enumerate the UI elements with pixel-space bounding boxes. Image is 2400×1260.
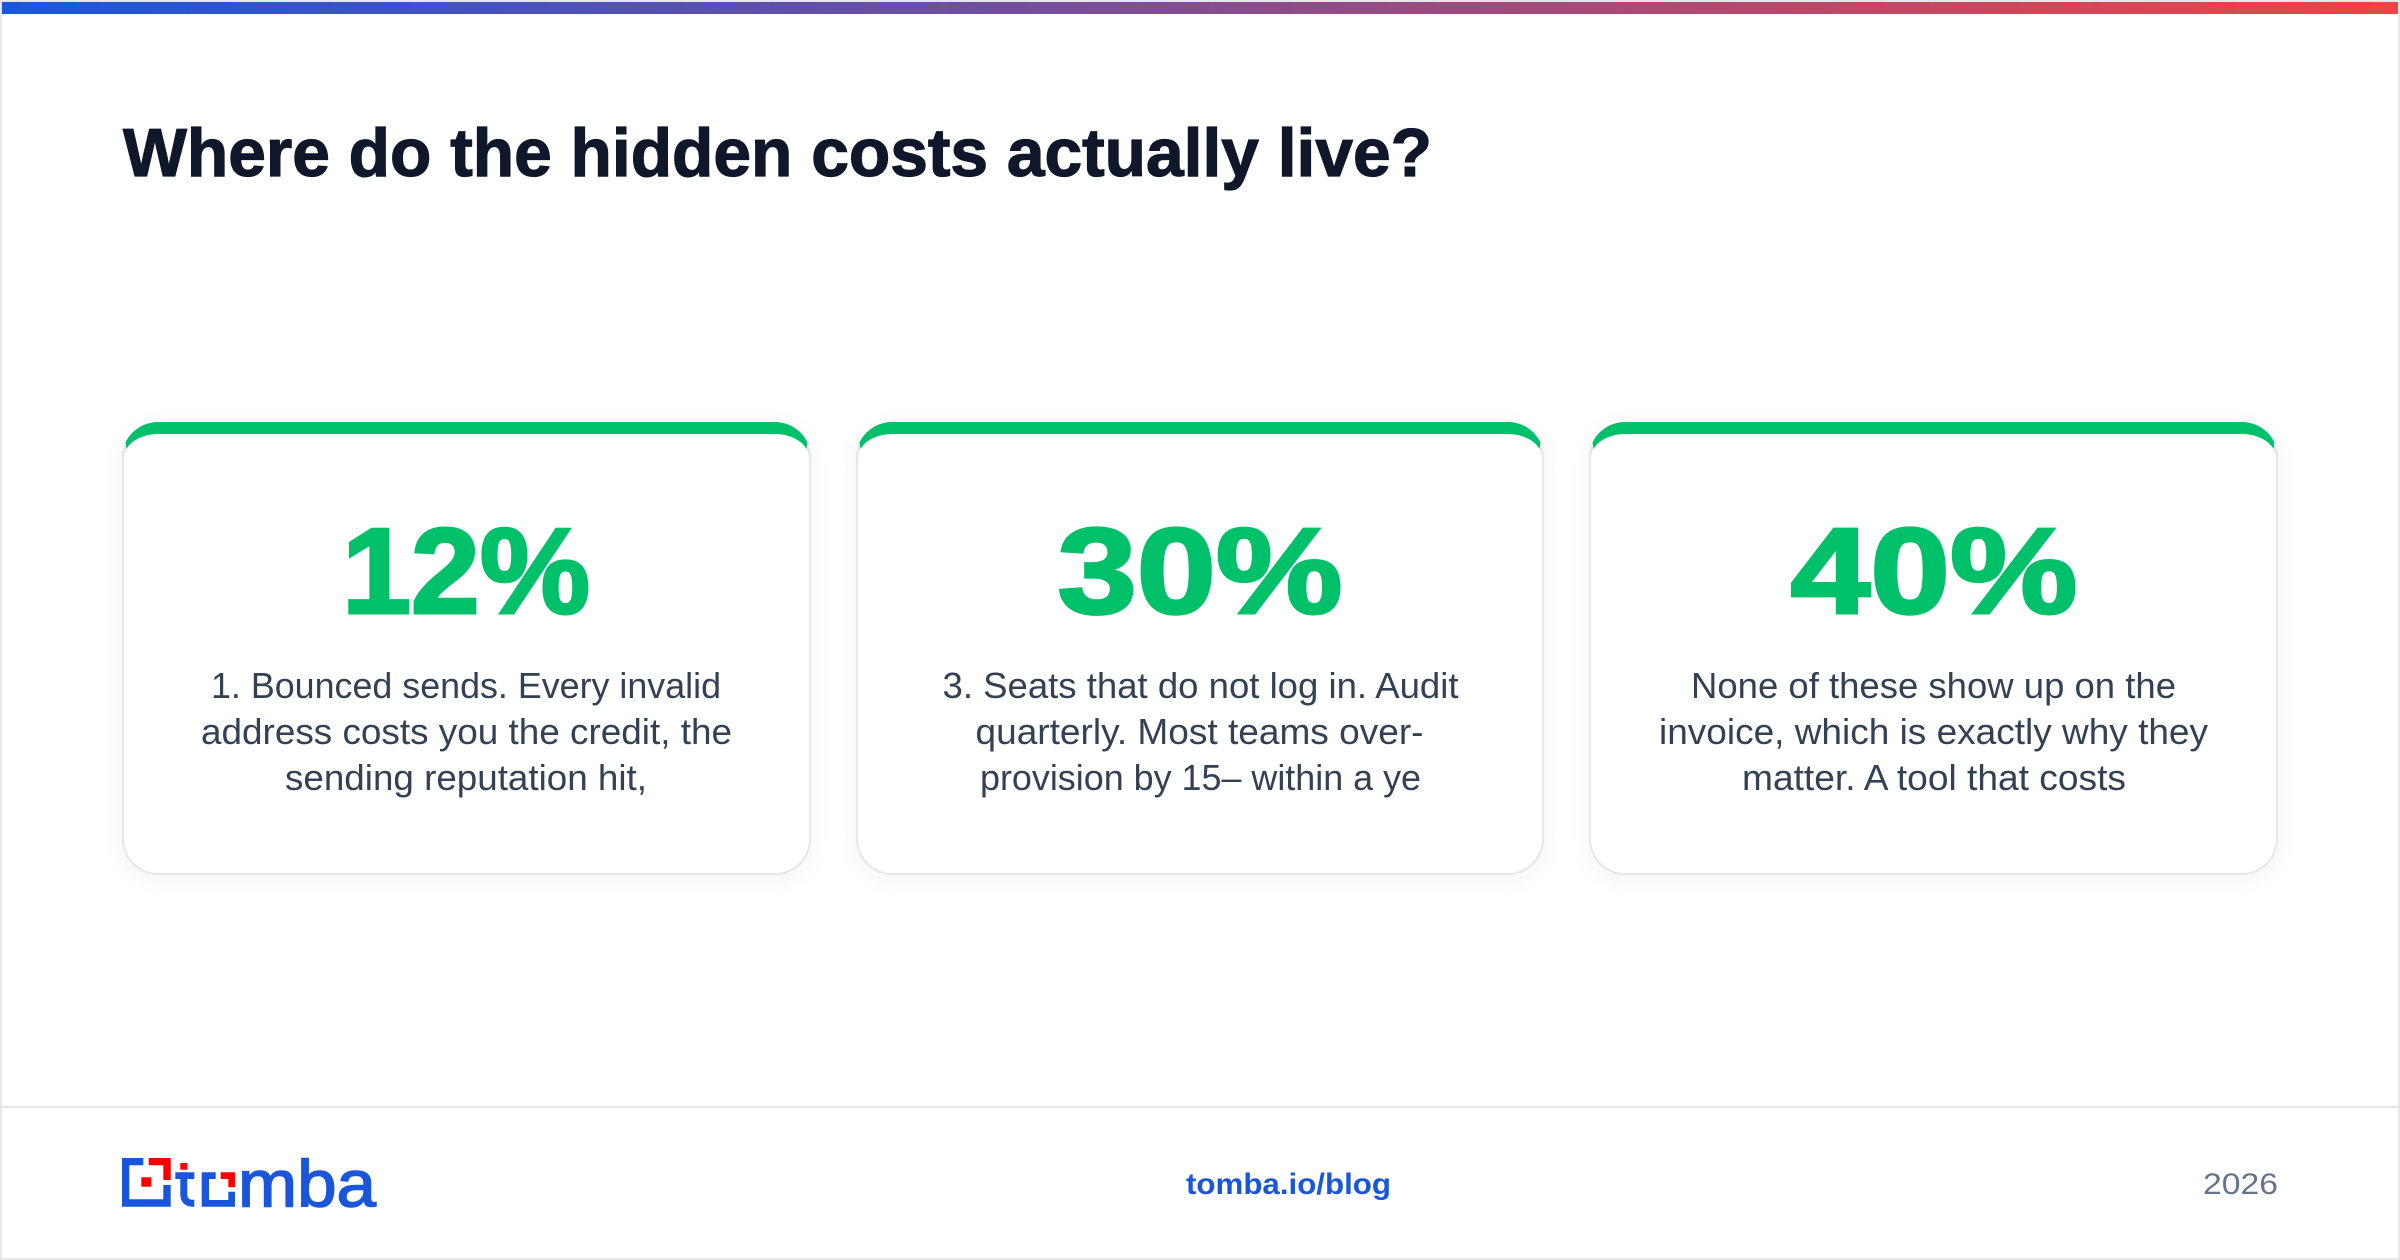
stat: 40%: 40% (1790, 503, 2078, 639)
description (201, 665, 732, 798)
card background (122, 422, 811, 875)
card content (201, 503, 732, 798)
title: Where do the hidden costs actually live? (123, 115, 1432, 191)
panel: bounced sends card (122, 422, 811, 875)
wordmark letters: mba (238, 1147, 376, 1221)
panel: unused seats card (856, 422, 1544, 875)
description: invoice, which is exactly why they (1659, 711, 2208, 752)
description: sending reputation hit, (285, 757, 647, 798)
top gradient bar (2, 2, 2398, 14)
description (942, 665, 1458, 798)
card content (942, 503, 1458, 798)
panel: invoice card (1589, 422, 2278, 875)
card background (1589, 422, 2278, 875)
description: None of these show up on the (1691, 665, 2176, 706)
icon: logo mark (122, 1158, 171, 1207)
description: address costs you the credit, the (201, 711, 732, 752)
icon: stylised t (175, 1163, 194, 1203)
description: matter. A tool that costs (1742, 757, 2126, 798)
card background (856, 422, 1544, 875)
description: 3. Seats that do not log in. Audit (942, 665, 1458, 706)
logo: tomba (122, 1147, 377, 1221)
card content (1659, 503, 2208, 798)
description: quarterly. Most teams over- (976, 711, 1424, 752)
footer divider (2, 1106, 2398, 1108)
stat: 30%: 30% (1058, 503, 1342, 639)
description: provision by 15– within a ye (980, 757, 1421, 798)
description: 1. Bounced sends. Every invalid (211, 665, 721, 706)
footer year: 2026 (2203, 1168, 2278, 1201)
icon: stylised o (202, 1172, 235, 1207)
stat: 12%: 12% (342, 503, 590, 639)
footer link: tomba.io/blog (1186, 1168, 1391, 1201)
description (1659, 665, 2208, 798)
